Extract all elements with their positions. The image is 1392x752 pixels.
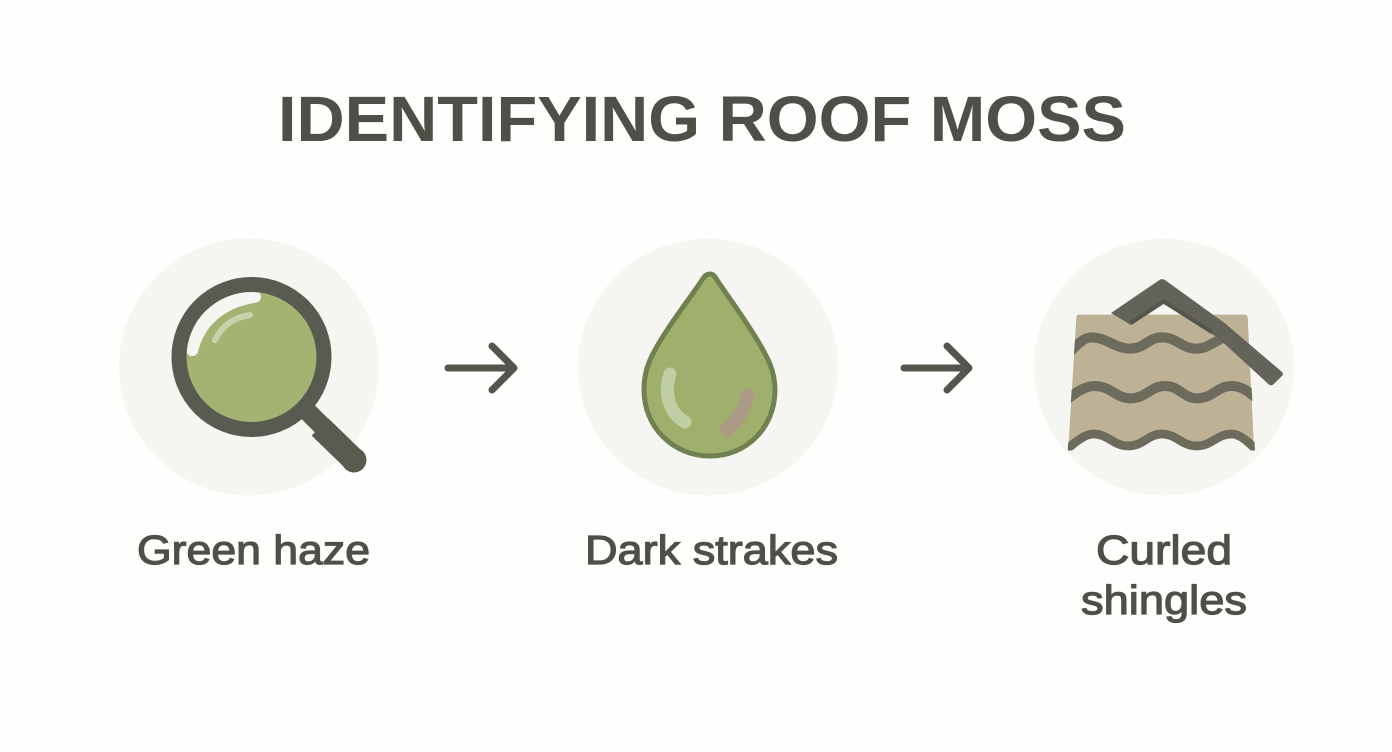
icon backdrop: circle two (578, 238, 838, 496)
arrow: second to third (904, 346, 969, 390)
icon: curled roof shingles (1063, 279, 1283, 453)
label: curled shingles: shingles (1081, 577, 1247, 623)
icon: droplet (644, 274, 775, 456)
title: IDENTIFYING ROOF MOSS (278, 83, 1126, 155)
icon: magnifying glass (179, 284, 366, 472)
icon backdrop: circle three (1034, 238, 1294, 496)
panel: dark streaks (578, 238, 838, 496)
panel: green haze (119, 238, 379, 496)
panel: curled shingles (1034, 238, 1294, 496)
label: curled shingles (1081, 527, 1247, 623)
icon backdrop: circle one (119, 238, 379, 496)
label: dark strakes: Dark strakes (585, 527, 838, 573)
label: curled shingles: Curled (1096, 527, 1232, 573)
arrow: first to second (448, 346, 514, 390)
label: green haze: Green haze (137, 527, 370, 573)
